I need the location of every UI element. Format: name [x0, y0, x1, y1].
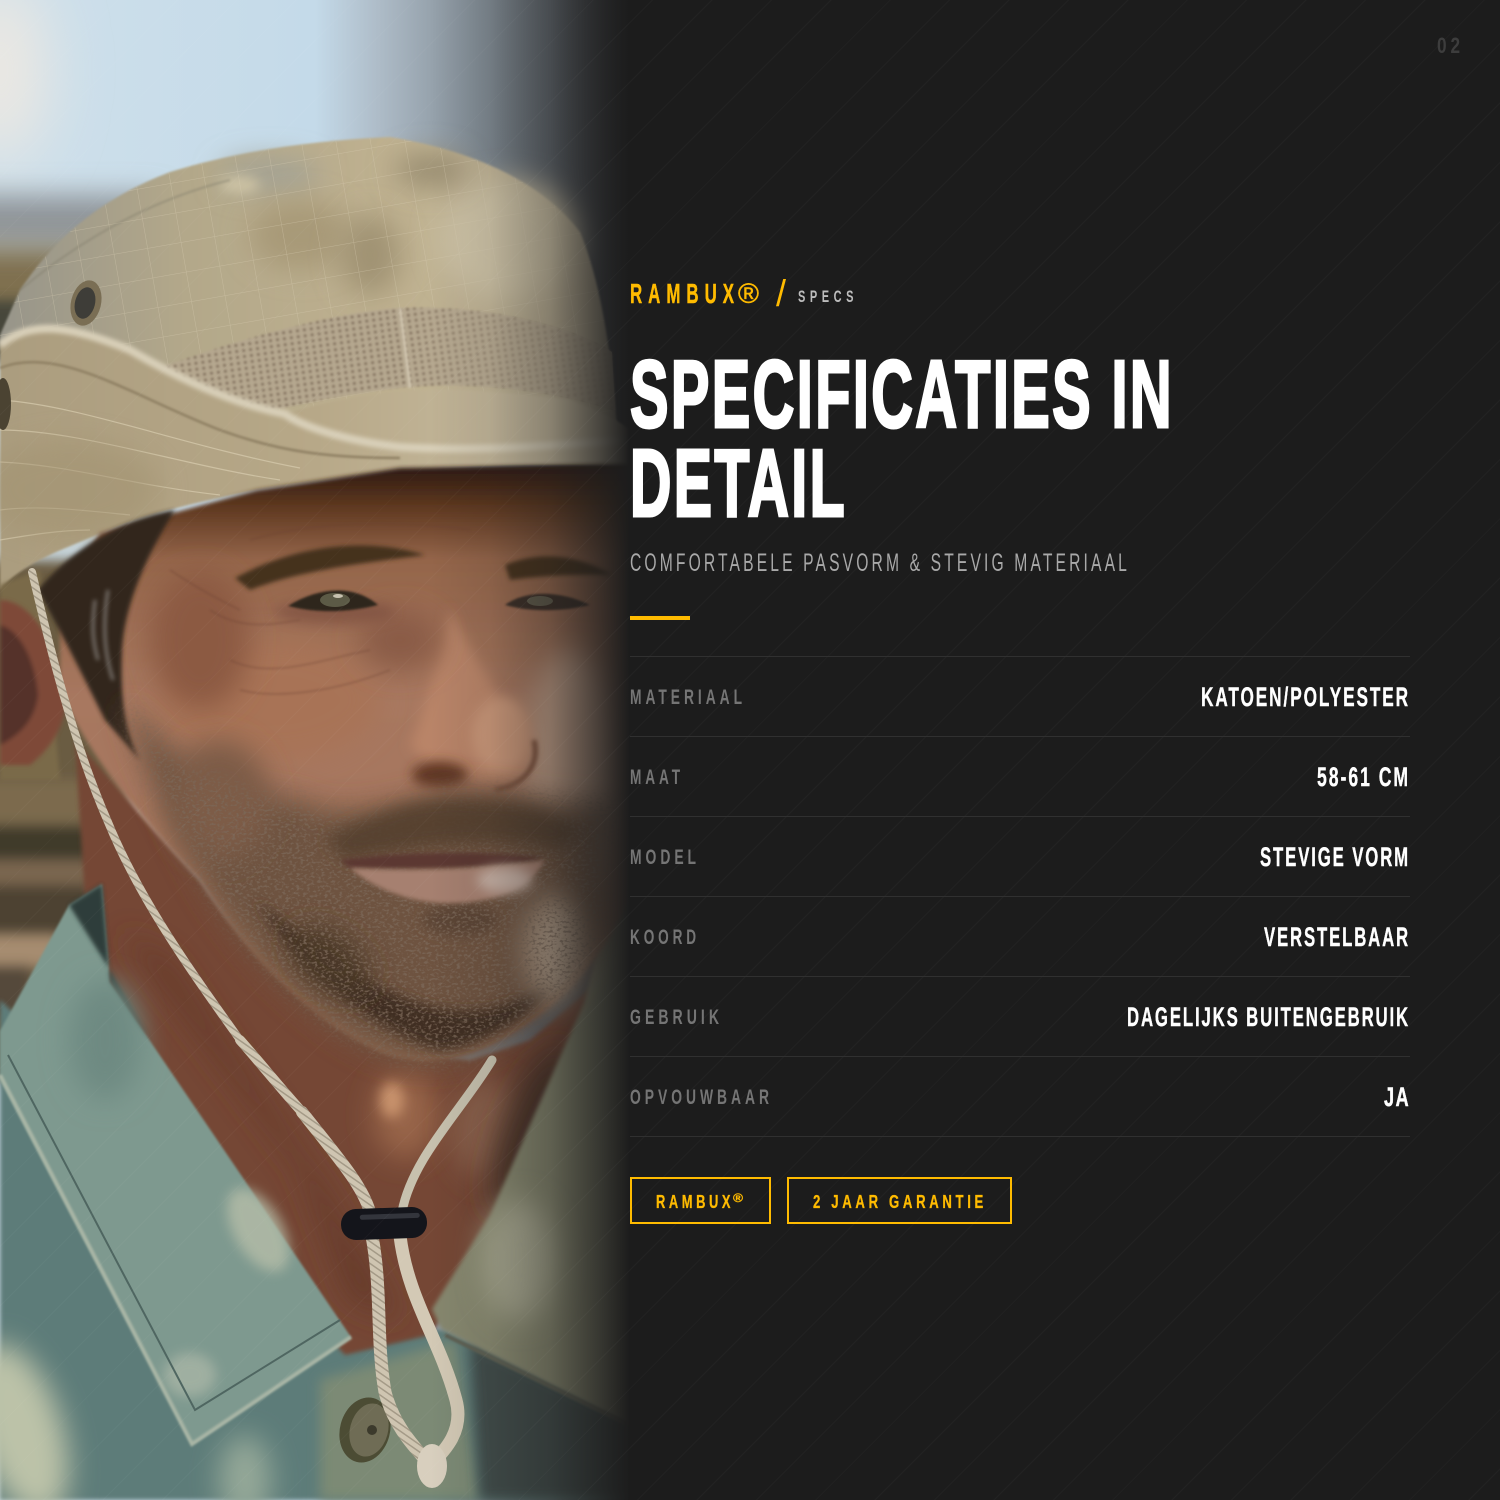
- photo: man wearing boonie hat: [0, 0, 625, 1500]
- row: koord: VERSTELBAAR: [1264, 922, 1410, 952]
- cord stopper: [341, 1207, 428, 1240]
- shirt collar right: [432, 890, 630, 1425]
- sky background: [0, 0, 630, 1500]
- spec table: [630, 656, 1410, 1137]
- row: koord: KOORD: [630, 926, 700, 949]
- row: opvouwbaar: OPVOUWBAAR: [630, 1086, 773, 1109]
- hat underside behind ear: [0, 570, 60, 780]
- row: opvouwbaar: JA: [1384, 1082, 1410, 1112]
- shirt collar left: [0, 884, 351, 1444]
- hair: [38, 510, 175, 760]
- accent rule: [630, 616, 690, 620]
- section label: SPECS: [798, 287, 858, 306]
- shirt button: [332, 1392, 398, 1468]
- badge: rambux: [631, 1178, 770, 1223]
- row: maat: MAAT: [630, 766, 684, 789]
- row: maat: 58-61 CM: [1317, 762, 1410, 792]
- moustache and mouth: [325, 799, 580, 903]
- subtitle: COMFORTABELE PASVORM & STEVIG MATERIAAL: [630, 549, 1130, 577]
- row: gebruik: GEBRUIK: [630, 1006, 723, 1029]
- row: gebruik: [630, 976, 1410, 1032]
- row: maat: [630, 736, 1410, 792]
- right cheek highlight: [524, 650, 620, 890]
- fade into dark panel: [430, 0, 630, 1500]
- right eye and brow: [505, 556, 612, 610]
- page number: 02: [1437, 33, 1464, 58]
- row: materiaal: MATERIAAL: [630, 686, 746, 709]
- eyebrow: brand and section: [630, 273, 858, 314]
- row: opvouwbaar: [630, 1056, 1410, 1137]
- hat brim: [0, 329, 628, 590]
- badge: garantie: [788, 1178, 1011, 1223]
- row: koord: [630, 896, 1410, 952]
- title: DETAIL: [630, 430, 847, 537]
- nose: [410, 610, 531, 783]
- row: materiaal: [630, 656, 1410, 712]
- stubble texture: [125, 700, 612, 1064]
- brand name: RAMBUX: [630, 278, 740, 309]
- row: model: [630, 816, 1410, 872]
- ear: [0, 600, 65, 765]
- wrinkles: [170, 523, 470, 694]
- title: [630, 341, 1174, 537]
- beard: [125, 700, 612, 1064]
- hat mesh band: [160, 308, 615, 420]
- badge: rambux: RAMBUX: [656, 1192, 734, 1212]
- slash: /: [776, 273, 787, 314]
- badge: rambux: ®: [733, 1191, 743, 1205]
- shirt body: [0, 1000, 630, 1500]
- neck: [75, 740, 600, 1355]
- blurred landscape behind the man: [0, 560, 130, 1080]
- face: [60, 464, 630, 1061]
- brand name: ®: [738, 278, 759, 309]
- left eye and brow: [235, 545, 425, 624]
- row: model: STEVIGE VORM: [1260, 842, 1410, 872]
- cord knot: [417, 1444, 447, 1488]
- hat eyelet: [66, 277, 106, 329]
- chin cord: [32, 572, 492, 1465]
- hat crown: [0, 137, 618, 440]
- row: model: MODEL: [630, 846, 700, 869]
- badge: garantie: 2 JAAR GARANTIE: [813, 1192, 987, 1212]
